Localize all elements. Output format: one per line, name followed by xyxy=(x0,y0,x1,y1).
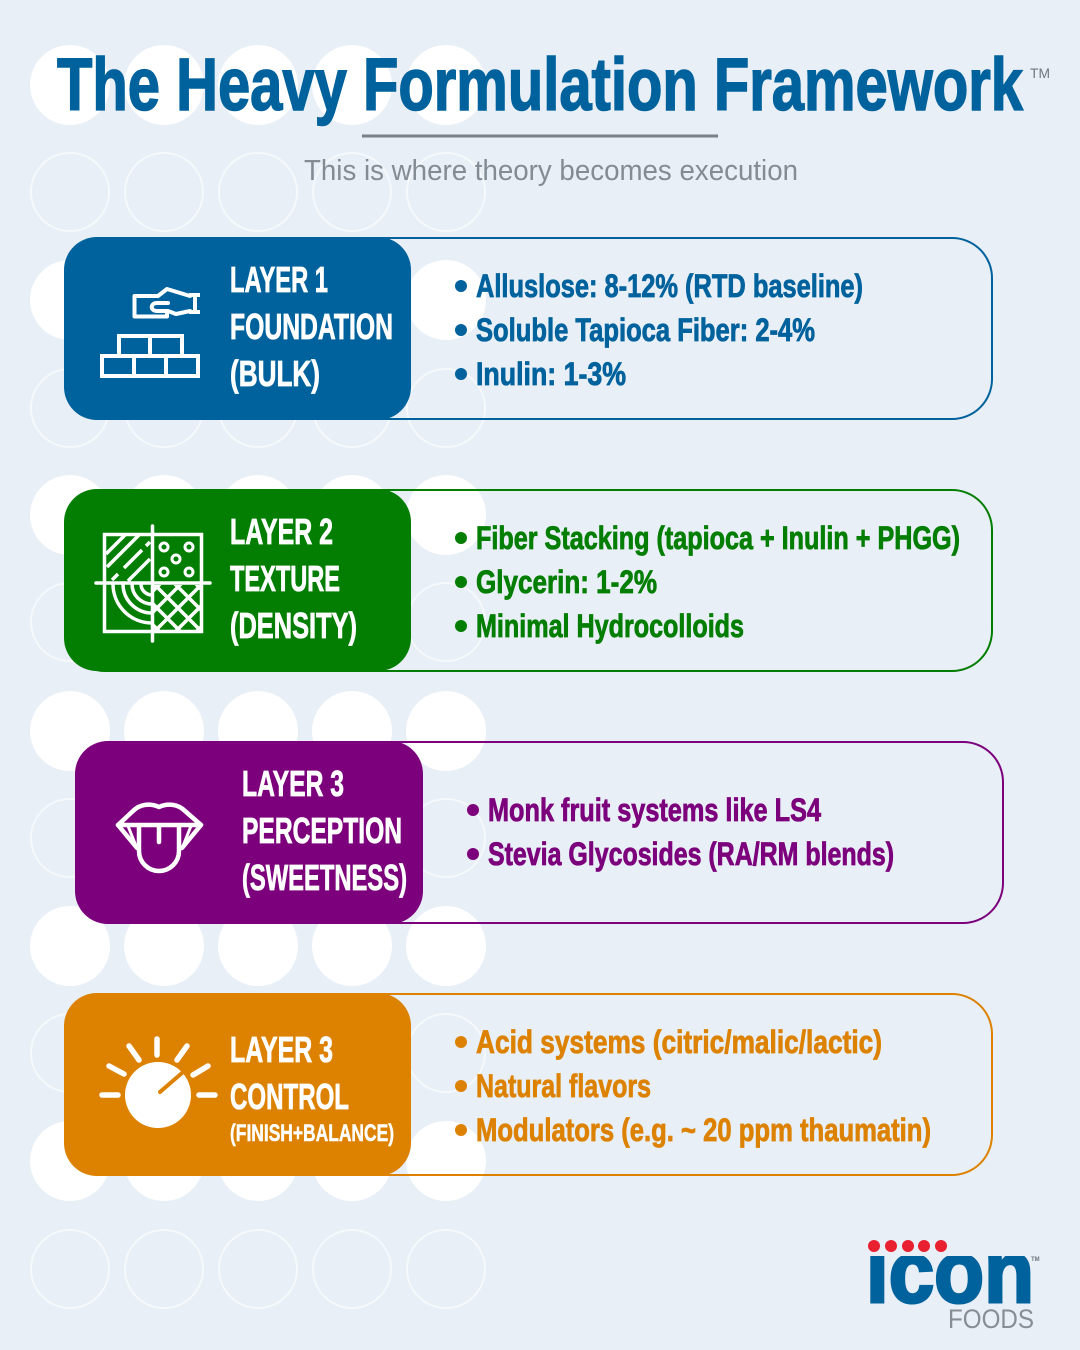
heading: layer 3 control: (FINISH+BALANCE) xyxy=(230,1120,394,1147)
list: layer 1 ingredients: Alluslose: 8-12% (RTD baseline) xyxy=(476,268,863,304)
heading: layer 1: FOUNDATION xyxy=(230,306,393,347)
trademark mark: TM xyxy=(1030,65,1050,81)
subtitle: This is where theory becomes execution xyxy=(304,155,798,187)
heading: layer 3 perception xyxy=(242,763,407,898)
icon: control dial xyxy=(102,1039,215,1128)
heading: layer 3 perception: (SWEETNESS) xyxy=(242,857,407,898)
list: layer 3 sweeteners: Stevia Glycosides (RA/RM blends) xyxy=(488,836,894,872)
list: layer 3 sweeteners: Monk fruit systems like LS4 xyxy=(488,792,821,828)
list: layer 1 ingredients xyxy=(455,268,863,392)
list: layer 2 ingredients: Fiber Stacking (tapioca + Inulin + PHGG) xyxy=(476,520,960,556)
icon: hand laying bricks xyxy=(102,289,200,376)
list: layer 3 sweeteners xyxy=(467,792,894,872)
icon: tongue and lips xyxy=(118,805,201,871)
heading: layer 3 perception: LAYER 3 xyxy=(242,763,344,804)
list: layer 2 ingredients xyxy=(455,520,960,644)
heading: layer 2: LAYER 2 xyxy=(230,511,333,552)
list: layer 2 ingredients: Minimal Hydrocolloids xyxy=(476,608,744,644)
panel: layer 3 control xyxy=(64,993,992,1176)
heading: layer 2: (DENSITY) xyxy=(230,605,357,646)
icon: texture swatches xyxy=(94,524,212,643)
list: layer 2 ingredients: Glycerin: 1-2% xyxy=(476,564,657,600)
heading: layer 1: (BULK) xyxy=(230,353,320,394)
panel: layer 3 perception xyxy=(75,741,1003,924)
logo: icon foods: icon xyxy=(866,1222,1034,1321)
heading: layer 2: TEXTURE xyxy=(230,558,340,599)
panel: layer 2 texture xyxy=(64,489,993,672)
list: layer 3 control ingredients xyxy=(455,1024,931,1148)
heading: layer 3 control: CONTROL xyxy=(230,1076,349,1117)
list: layer 1 ingredients: Inulin: 1-3% xyxy=(476,356,626,392)
heading: layer 1: LAYER 1 xyxy=(230,259,328,300)
logo: icon foods: FOODS xyxy=(948,1304,1034,1334)
panel: layer 1 foundation xyxy=(64,237,992,420)
heading: layer 3 control: LAYER 3 xyxy=(230,1029,333,1070)
heading: layer 3 perception: PERCEPTION xyxy=(242,810,402,851)
list: layer 3 control ingredients: Natural flavors xyxy=(476,1068,651,1104)
logo: icon foods: TM xyxy=(1031,1257,1040,1263)
list: layer 1 ingredients: Soluble Tapioca Fiber: 2-4% xyxy=(476,312,815,348)
heading: layer 3 control xyxy=(230,1029,394,1147)
list: layer 3 control ingredients: Modulators (e.g. ~ 20 ppm thaumatin) xyxy=(476,1112,931,1148)
heading: layer 2 xyxy=(230,511,357,646)
heading: layer 1 xyxy=(230,259,393,394)
list: layer 3 control ingredients: Acid systems (citric/malic/lactic) xyxy=(476,1024,882,1060)
